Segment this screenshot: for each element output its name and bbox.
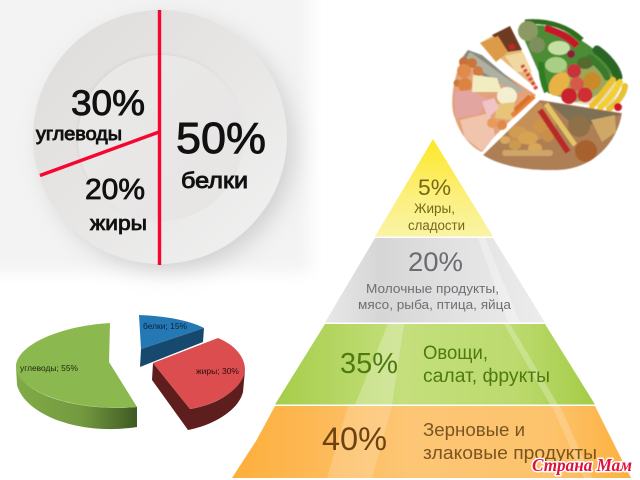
tier: 20% dairy and protein <box>325 238 545 322</box>
tier: 35% vegetables and fruit <box>275 324 595 404</box>
tier: 20% dairy and protein: Молочные продукты, <box>366 282 499 296</box>
label: 50% белки <box>176 114 266 193</box>
label: 30% углеводы: 30% <box>71 84 145 123</box>
plate background <box>0 0 310 272</box>
food pyramid <box>232 139 631 478</box>
tier: 35% vegetables and fruit: салат, фрукты <box>423 366 550 387</box>
slice: жиры 30% <box>152 338 245 430</box>
tier: 40% grains: Зерновые и <box>423 420 525 440</box>
sector: sweets and fats <box>480 26 538 90</box>
label: 50% белки: белки <box>181 168 248 193</box>
label: 20% жиры: жиры <box>90 213 147 235</box>
tier: 40% grains: 40% <box>322 421 387 457</box>
watermark: Страна Мам <box>532 455 632 475</box>
plate <box>33 10 293 270</box>
tier: 35% vegetables and fruit: 35% <box>340 348 398 380</box>
slice: углеводы 55% <box>16 323 137 429</box>
sector: meat, fish and dairy <box>452 50 536 152</box>
red divider lines <box>40 10 160 265</box>
slice: белки 15%: белки; 15% <box>143 321 187 331</box>
tier: 5% fats and sweets: Жиры, <box>414 201 455 216</box>
label: 50% белки: 50% <box>176 114 266 163</box>
label: 20% жиры: 20% <box>85 174 145 206</box>
tier: 5% fats and sweets: сладости <box>408 218 465 233</box>
tier: 5% fats and sweets <box>375 139 493 236</box>
sector: grains and bread <box>483 100 622 170</box>
label: 20% жиры <box>85 174 147 235</box>
tier: 5% fats and sweets: 5% <box>418 175 451 200</box>
slice: белки 15% <box>139 315 204 367</box>
slice: углеводы 55%: углеводы; 55% <box>20 363 78 373</box>
sector: vegetables and fruit <box>518 21 625 111</box>
tier: 35% vegetables and fruit: Овощи, <box>423 343 488 364</box>
food wheel illustration <box>452 21 625 170</box>
tier: 40% grains: злаковые продукты <box>423 443 597 463</box>
tier: 40% grains <box>232 406 631 478</box>
label: 30% углеводы <box>36 84 145 144</box>
slice: жиры 30%: жиры; 30% <box>196 366 239 376</box>
label: 30% углеводы: углеводы <box>36 124 122 144</box>
tier: 20% dairy and protein: 20% <box>408 247 463 277</box>
tier: 20% dairy and protein: мясо, рыба, птица, яйца <box>358 298 511 312</box>
3D pie chart <box>16 315 245 430</box>
plate diagram <box>33 10 293 270</box>
